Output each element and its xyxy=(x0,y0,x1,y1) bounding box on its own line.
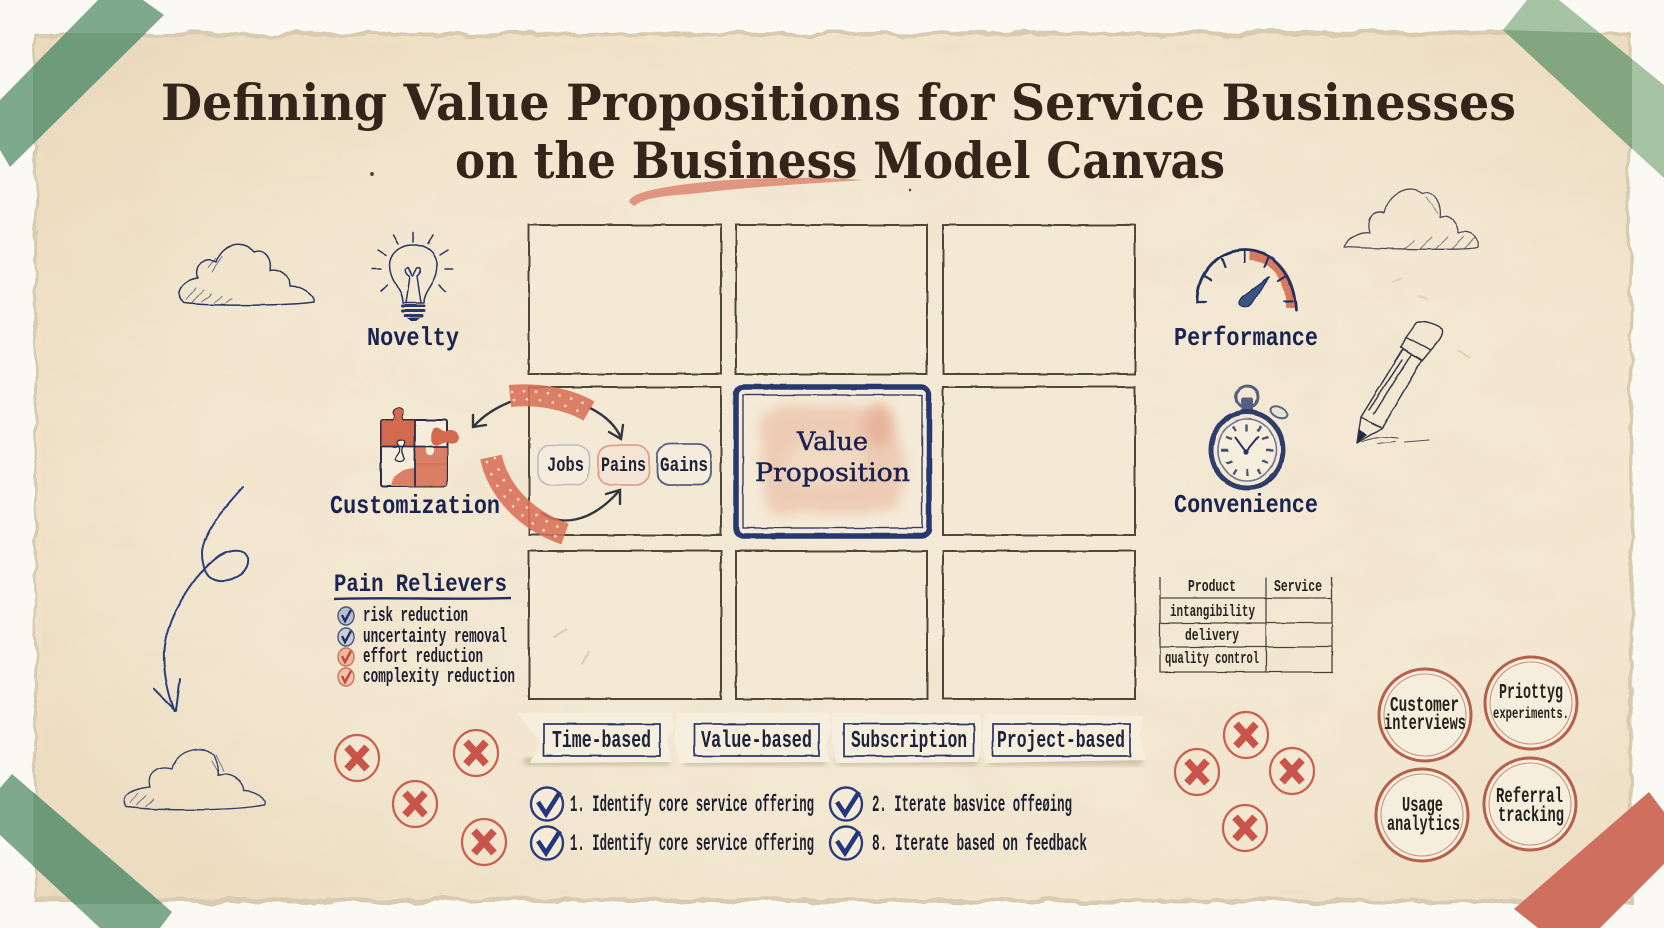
stamp: referral tracking: Referral xyxy=(1496,786,1563,809)
item: effort reduction: effort reduction xyxy=(363,646,483,669)
cloud: top right xyxy=(1344,189,1478,249)
item: complexity reduction: complexity reduction xyxy=(363,666,515,689)
pill: Gains: Gains xyxy=(660,455,708,478)
item: complexity reduction xyxy=(338,666,515,689)
pricing tabs xyxy=(517,713,1146,765)
pill: Jobs: Jobs xyxy=(547,455,584,478)
step: iterate 2: 2. Iterate basvice offeøing xyxy=(872,792,1072,818)
pain relievers heading: Pain Relievers xyxy=(334,570,507,599)
tab: Time-based xyxy=(517,713,674,765)
tab: Project-based: Project-based xyxy=(997,728,1125,755)
title: on the Business Model Canvas xyxy=(455,131,1225,190)
step: identify 1: 1. Identify core service offering xyxy=(570,792,814,818)
step: iterate 2 xyxy=(830,788,1072,820)
red x marks: left cluster xyxy=(335,730,506,865)
pill: Gains xyxy=(657,444,711,485)
canvas grid xyxy=(529,225,1135,699)
pill: Pains xyxy=(598,445,649,485)
item: uncertainty removal: uncertainty removal xyxy=(363,626,507,649)
icon: performance gauge xyxy=(1197,250,1296,310)
tab: Value-based xyxy=(674,713,832,765)
item: risk reduction xyxy=(338,605,468,628)
stamp: referral tracking xyxy=(1484,758,1576,850)
cloud: left xyxy=(179,244,314,305)
pill: Jobs xyxy=(538,445,589,485)
value proposition box xyxy=(736,387,929,536)
comparison table: quality control xyxy=(1165,650,1259,669)
comparison table: Service xyxy=(1274,578,1322,597)
icon: puzzle xyxy=(381,408,459,486)
value proposition label: Value xyxy=(796,427,868,456)
comparison table xyxy=(1160,577,1332,672)
label: Convenience: Convenience xyxy=(1174,490,1318,520)
stamp: customer interviews: interviews xyxy=(1384,713,1466,736)
stamp: prototype experiments xyxy=(1485,657,1577,749)
step: identify 1 xyxy=(531,788,814,820)
steps checklist xyxy=(531,788,1087,860)
tab: Subscription: Subscription xyxy=(851,728,967,755)
stamp: customer interviews xyxy=(1379,669,1471,761)
tape: top left xyxy=(0,0,164,167)
pills: jobs pains gains xyxy=(538,444,711,485)
washi tape ribbons xyxy=(487,391,592,538)
title: Defining Value Propositions for Service Businesses xyxy=(161,73,1516,132)
step: identify 2 xyxy=(531,826,814,860)
item: uncertainty removal xyxy=(338,626,507,649)
item: risk reduction: risk reduction xyxy=(363,605,468,628)
cloud: bottom left xyxy=(124,749,265,810)
pain relievers list xyxy=(338,605,515,689)
value proposition label: Proposition xyxy=(755,458,910,487)
step: iterate 8: 8. Iterate based on feedback xyxy=(872,831,1087,857)
tab: Project-based xyxy=(982,714,1146,765)
stamp: usage analytics: analytics xyxy=(1387,814,1460,837)
stamp: prototype experiments: experiments. xyxy=(1493,705,1569,723)
curly arrow xyxy=(154,487,248,711)
icon: stopwatch xyxy=(1211,386,1289,488)
step: iterate 8 xyxy=(830,826,1087,860)
tab: Subscription xyxy=(832,713,982,765)
label: Customization: Customization xyxy=(330,491,500,521)
stamp: prototype experiments: Priottyg xyxy=(1499,682,1563,705)
cycle arrows xyxy=(473,402,623,520)
label: Performance: Performance xyxy=(1174,323,1318,353)
red x marks: right cluster xyxy=(1175,712,1314,851)
stamp: referral tracking: tracking xyxy=(1498,805,1564,828)
stamp: usage analytics xyxy=(1376,769,1468,861)
stamp: customer interviews: Customer xyxy=(1390,695,1459,718)
tape: top right xyxy=(1503,0,1664,178)
title xyxy=(161,73,1516,190)
tab: Time-based: Time-based xyxy=(552,728,651,755)
value proposition label xyxy=(755,427,910,487)
stamp: usage analytics: Usage xyxy=(1402,795,1443,818)
icon: pencil xyxy=(1357,322,1443,444)
tab: Value-based: Value-based xyxy=(701,728,812,755)
step: identify 2: 1. Identify core service offering xyxy=(570,831,814,857)
comparison table: Product xyxy=(1188,578,1236,597)
pill: Pains: Pains xyxy=(601,455,646,478)
icon: light bulb xyxy=(372,232,453,321)
comparison table: intangibility xyxy=(1170,603,1255,622)
tape: bottom left xyxy=(0,774,172,928)
item: effort reduction xyxy=(338,646,483,669)
title underline brush stroke xyxy=(629,178,864,206)
stamps: research methods xyxy=(1376,657,1577,861)
comparison table: delivery xyxy=(1185,627,1239,646)
label: Novelty: Novelty xyxy=(367,323,459,353)
tape: bottom right xyxy=(1514,792,1664,928)
